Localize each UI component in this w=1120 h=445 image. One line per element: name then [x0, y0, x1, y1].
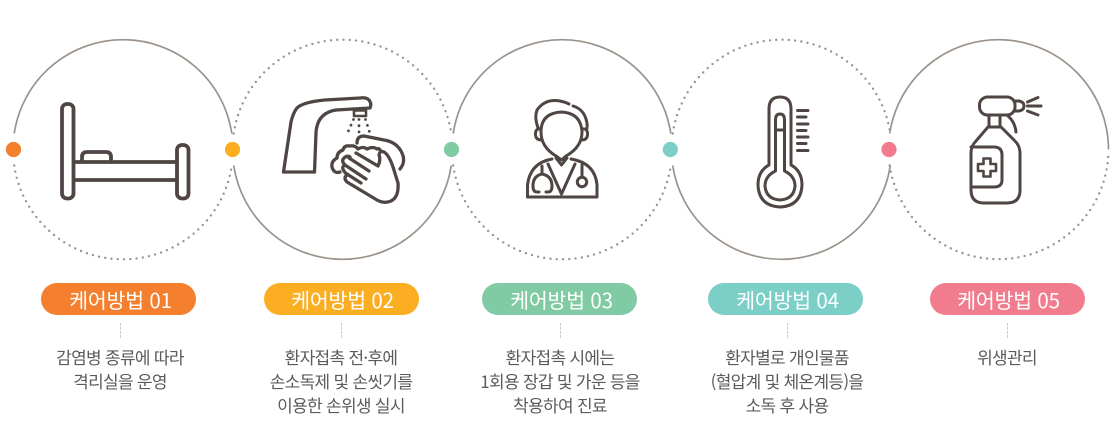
label pill 04: 케어방법 04 [736, 284, 839, 314]
icon: thermometer [758, 97, 808, 207]
circle 5 ring [890, 40, 1108, 259]
description 03: 환자접촉 시에는 [506, 344, 614, 369]
icon: bed [62, 104, 188, 198]
description 02 [270, 344, 412, 417]
label pill 01: 케어방법 01 [69, 284, 172, 314]
icon: washing hands [284, 98, 404, 202]
label pill 01 [41, 283, 196, 315]
description 03: 1회용 장갑 및 가운 등을 [480, 368, 640, 393]
label pill 05 [930, 283, 1085, 315]
label pill 02: 케어방법 02 [291, 284, 394, 314]
description 05: 위생관리 [977, 344, 1037, 369]
description 01 [56, 344, 184, 393]
circle 2 ring [234, 40, 451, 259]
icon: doctor [528, 100, 597, 197]
description 02: 이용한 손위생 실시 [277, 392, 405, 417]
description 04: 소독 후 사용 [746, 392, 828, 417]
label pill 03 [482, 283, 637, 315]
description 04: (혈압계 및 체온계등)을 [711, 368, 863, 393]
circle 1 ring [14, 40, 232, 259]
label pill 04 [708, 283, 863, 315]
description 03 [480, 344, 640, 417]
description 02: 환자접촉 전·후에 [285, 344, 397, 369]
label pill 02 [264, 283, 419, 315]
circle 4 ring [673, 40, 890, 259]
icon: spray bottle [971, 97, 1041, 203]
label pill 05: 케어방법 05 [957, 284, 1060, 314]
description 04 [711, 344, 864, 417]
description 01: 격리실을 운영 [73, 368, 167, 393]
description 02: 손소독제 및 손씻기를 [270, 368, 412, 393]
connector dots [6, 142, 897, 157]
description 01: 감염병 종류에 따라 [56, 344, 184, 369]
description 03: 착용하여 진료 [513, 392, 607, 417]
label pill 03: 케어방법 03 [510, 284, 613, 314]
circle 3 ring [453, 40, 671, 259]
description 04: 환자별로 개인물품 [725, 344, 849, 369]
